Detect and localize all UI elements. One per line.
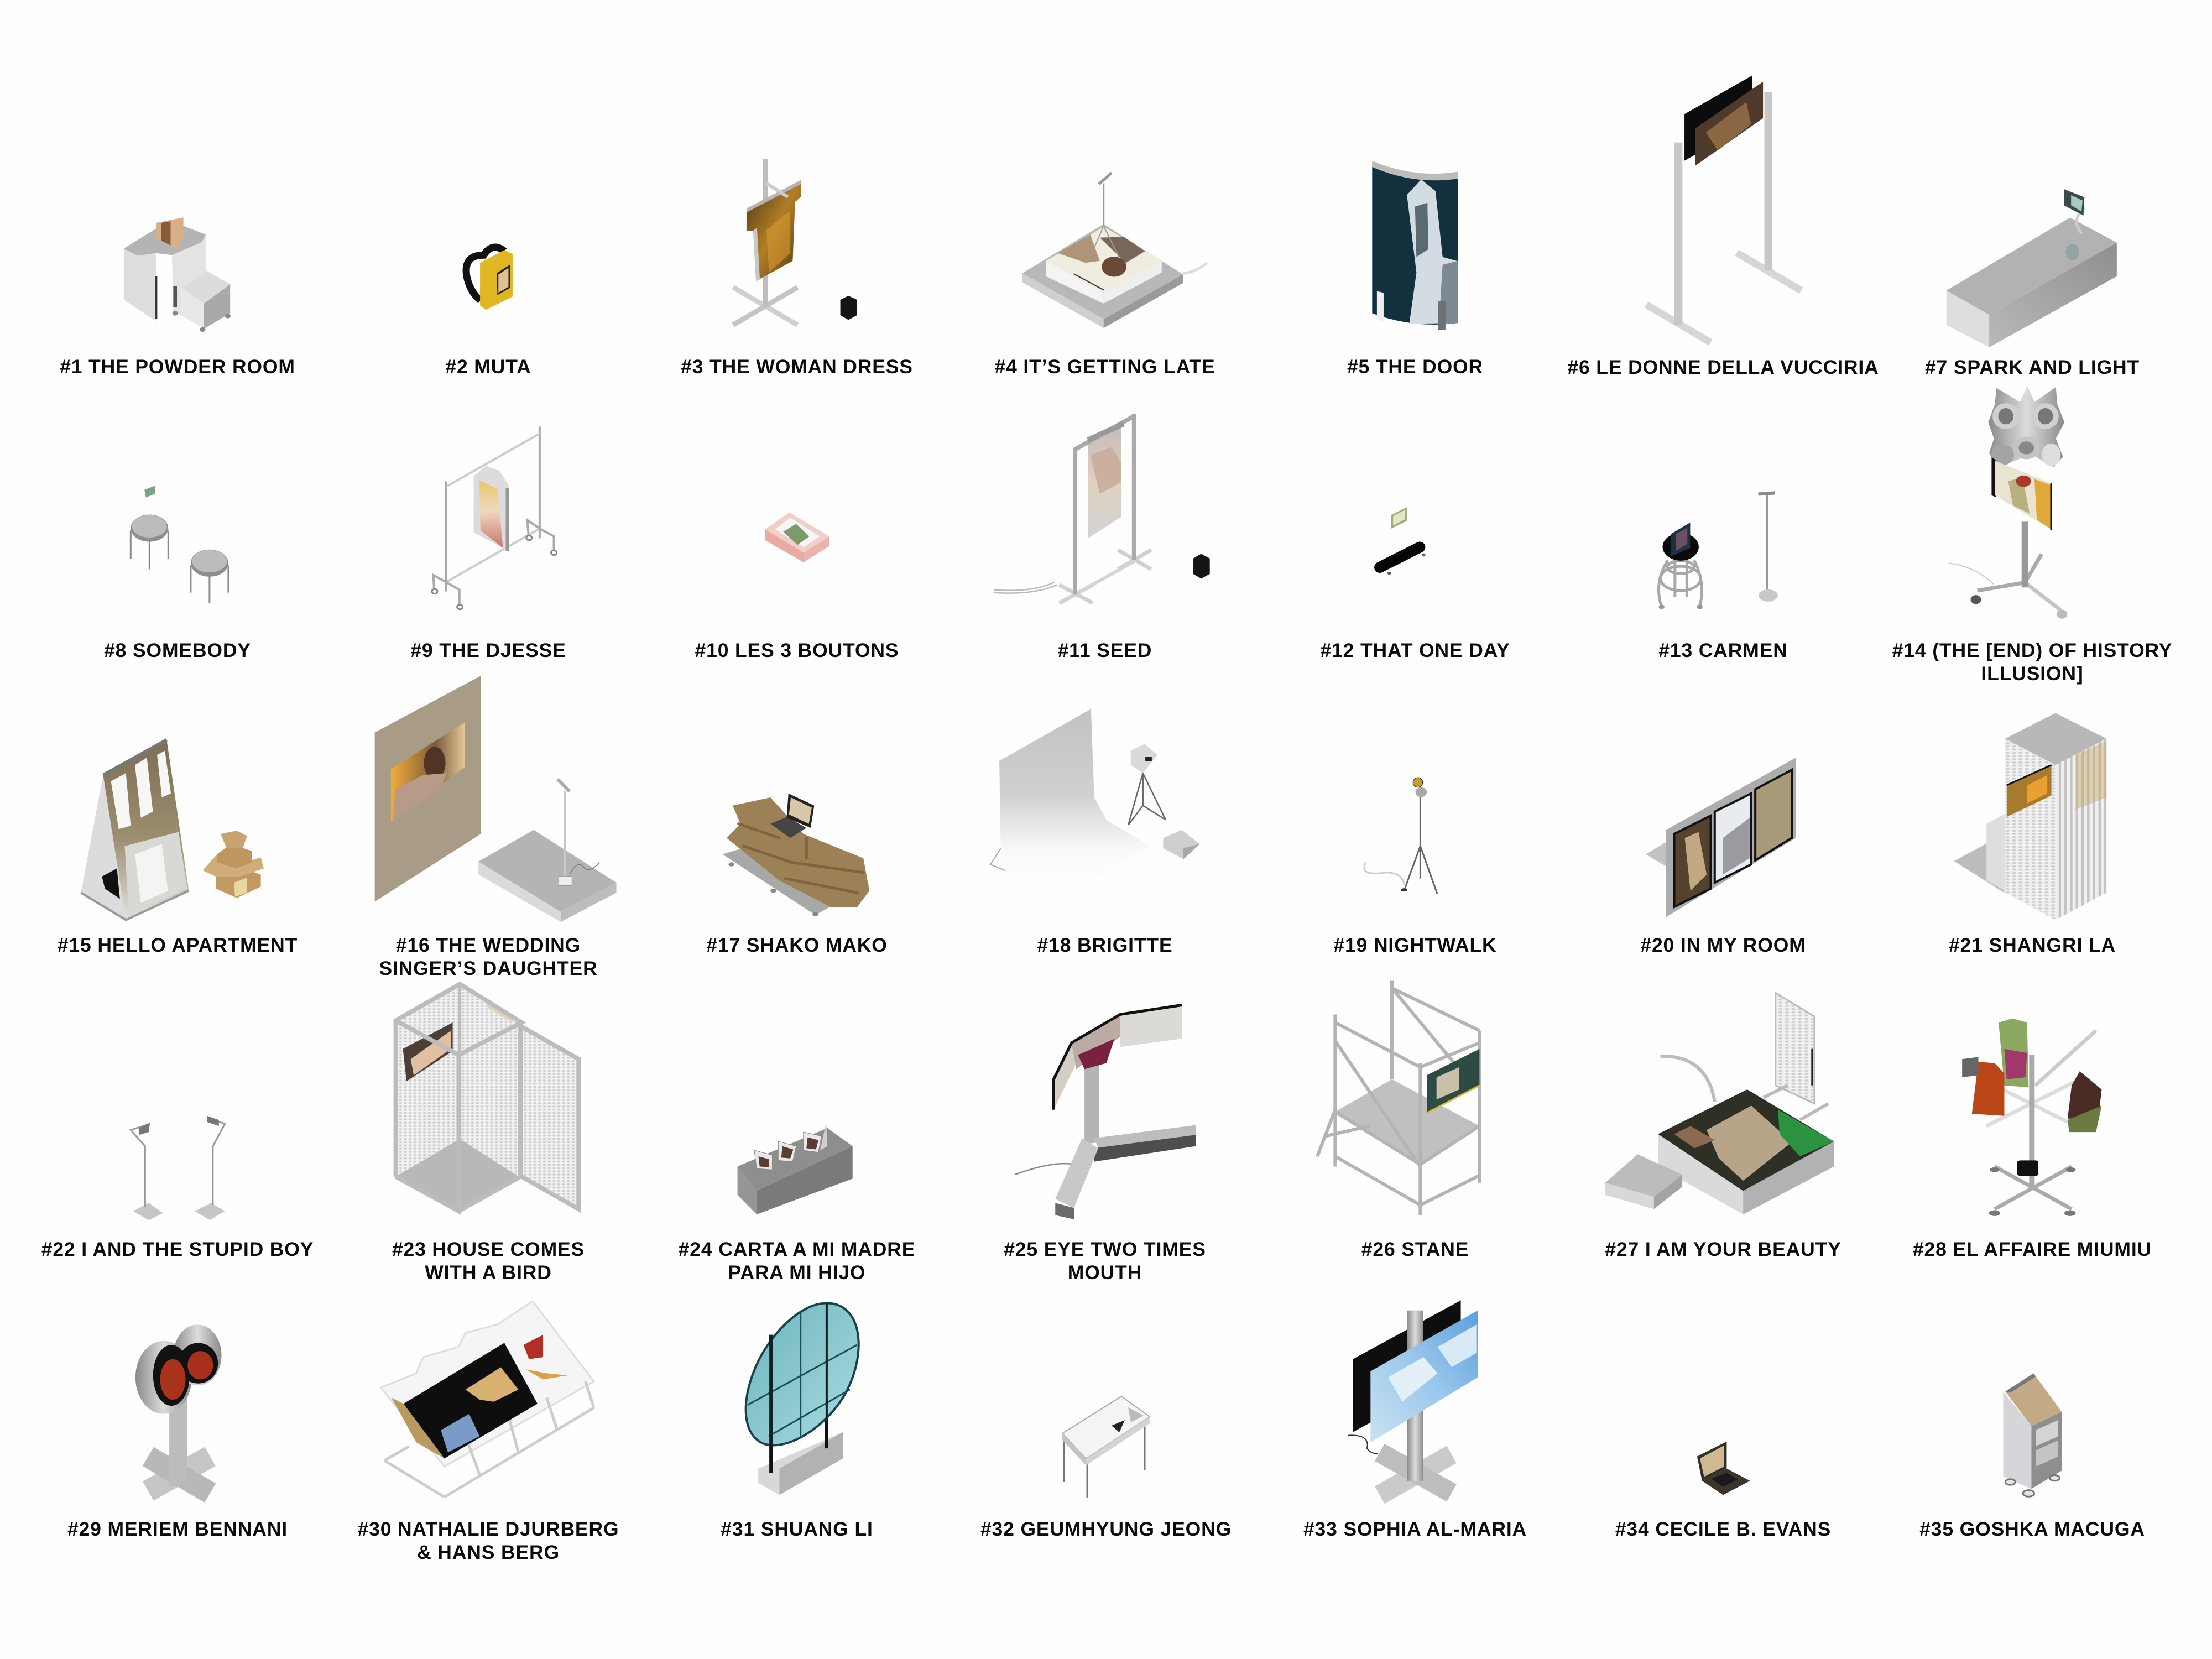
label: #10: #10 LES 3 BOUTONS — [695, 639, 899, 661]
icon: horn cluster on wheeled stand with screen — [1949, 386, 2067, 619]
label: #29: #29 MERIEM BENNANI — [67, 1518, 288, 1540]
label: #16: #16 THE WEDDING — [396, 934, 581, 956]
icon: mesh cage with screen — [396, 984, 578, 1211]
label: #20: #20 IN MY ROOM — [1640, 934, 1806, 956]
panel: #6 Le Donne Della Vucciria — [1567, 76, 1879, 378]
label: #25: #25 EYE TWO TIMES — [1004, 1238, 1206, 1260]
icon: neon twin-lobe sign on cross base — [135, 1324, 222, 1493]
label: #23: #23 HOUSE COMES — [392, 1238, 585, 1260]
label: #35: #35 GOSHKA MACUGA — [1919, 1518, 2145, 1540]
panel: #26 Stane — [1317, 981, 1479, 1260]
label: #22: #22 I AND THE STUPID BOY — [41, 1238, 314, 1260]
icon: powder room booth and cabinet — [124, 217, 231, 332]
label: #17: #17 SHAKO MAKO — [706, 934, 888, 956]
icon: photo backdrop with light and box — [989, 709, 1199, 899]
panel: #27 I Am Your Beauty — [1605, 993, 1841, 1260]
panel: #24 Carta a Mi Madre Para Mi Hijo — [679, 1122, 915, 1284]
icon: textured wall with screen and microphone plinth — [375, 676, 617, 922]
icon: pink box with screen — [765, 512, 830, 562]
icon: two stools and small screen — [131, 486, 228, 603]
label: #13: #13 CARMEN — [1658, 639, 1788, 661]
panel: #21 Shangri La — [1949, 713, 2116, 956]
icon: banner frame with speaker — [994, 414, 1210, 603]
icon: grey block with three small screens — [738, 1122, 853, 1214]
panel: #17 Shako Mako — [706, 794, 888, 956]
icon: triptych window screens — [1646, 758, 1796, 917]
panel: #5 The Door — [1347, 161, 1483, 378]
panel: #13 Carmen — [1658, 493, 1788, 661]
label: #28: #28 EL AFFAIRE MIUMIU — [1913, 1238, 2152, 1260]
panel: #18 Brigitte — [989, 709, 1199, 956]
panel: #35 Goshka Macuga — [1919, 1373, 2145, 1540]
label: #14: ILLUSION] — [1981, 662, 2084, 685]
panel: #29 Meriem Bennani — [67, 1324, 288, 1540]
label: #12: #12 THAT ONE DAY — [1320, 639, 1510, 661]
icon: LED box, mesh panel and small box — [1605, 993, 1834, 1214]
icon: laptop — [1697, 1442, 1750, 1495]
label: #7: #7 SPARK AND LIGHT — [1925, 356, 2140, 378]
panel: #11 Seed — [994, 414, 1210, 661]
panel: #25 Eye Two Times Mouth — [1004, 1005, 1206, 1284]
panel: #7 Spark and Light — [1925, 189, 2140, 378]
panel: #28 El Affaire Miumiu — [1913, 1019, 2152, 1260]
icon: bar stool with screen and microphone stand — [1658, 493, 1778, 609]
panel: #32 Geumhyung Jeong — [980, 1396, 1232, 1540]
panel: #31 Shuang Li — [721, 1302, 873, 1540]
label: #31: #31 SHUANG LI — [721, 1518, 873, 1540]
label: #11: #11 SEED — [1058, 639, 1152, 661]
panel: #23 House Comes With a Bird — [392, 984, 585, 1284]
label: #23: WITH A BIRD — [425, 1261, 552, 1284]
panel: #34 Cecile B. Evans — [1615, 1442, 1831, 1540]
icon: wheeled cart with display top — [2003, 1373, 2062, 1496]
panel: #16 The Wedding Singer's Daughter — [375, 676, 617, 979]
panel: #15 Hello Apartment — [58, 740, 298, 956]
icon: circular teal screen on plinth — [746, 1302, 859, 1495]
icon: two small screen stands — [131, 1116, 225, 1220]
panel: #12 That One Day — [1320, 507, 1510, 661]
label: #15: #15 HELLO APARTMENT — [58, 934, 298, 956]
panel: #3 The Woman Dress — [681, 159, 913, 378]
label: #25: MOUTH — [1068, 1261, 1142, 1284]
panel: #30 Nathalie Djurberg & Hans Berg — [358, 1301, 619, 1563]
label: #21: #21 SHANGRI LA — [1949, 934, 2116, 956]
icon: white table with object — [1062, 1396, 1150, 1498]
icon: curved screen door — [1372, 161, 1458, 330]
icon: T-shaped screen on stand with speaker — [733, 159, 857, 325]
panel: #9 The Djesse — [410, 426, 566, 661]
label: #16: SINGER’S DAUGHTER — [379, 957, 598, 979]
label: #24: #24 CARTA A MI MADRE — [679, 1238, 915, 1260]
icon: three-panel screen on Y base — [1015, 1005, 1196, 1219]
icon: metal scaffold with screen — [1317, 981, 1479, 1215]
panel: #14 (The [End) of History Illusion] — [1892, 386, 2172, 685]
label: #2: #2 MUTA — [445, 356, 531, 378]
label: #5: #5 THE DOOR — [1347, 356, 1483, 378]
icon: plinth with projected image and microphone — [1022, 173, 1207, 328]
label: #19: #19 NIGHTWALK — [1333, 934, 1497, 956]
icon: sandbags on trolley with laptop — [722, 794, 869, 916]
panel: #33 Sophia Al-Maria — [1303, 1300, 1527, 1540]
label: #24: PARA MI HIJO — [728, 1261, 865, 1284]
label: #8: #8 SOMEBODY — [104, 639, 251, 661]
label: #6: #6 LE DONNE DELLA VUCCIRIA — [1567, 356, 1879, 378]
icon: clothes rail with hanging screen — [432, 426, 557, 609]
icon: yellow backpack with screen — [466, 247, 513, 310]
panel: #8 Somebody — [104, 486, 251, 661]
panel: #20 In My Room — [1640, 758, 1806, 956]
panel: #4 It's Getting Late — [994, 173, 1215, 378]
panel: #22 I and the Stupid Boy — [41, 1116, 314, 1260]
icon: double-sided sky screen on pole — [1348, 1300, 1478, 1495]
label: #32: #32 GEUMHYUNG JEONG — [980, 1518, 1232, 1540]
panel: #2 Muta — [445, 247, 531, 378]
icon: two-screen gantry — [1646, 76, 1801, 342]
panel: #1 The Powder Room — [60, 217, 295, 378]
label: #18: #18 BRIGITTE — [1037, 934, 1172, 956]
icon: perforated tower with screen — [1954, 713, 2106, 920]
label: #30: #30 NATHALIE DJURBERG — [358, 1518, 619, 1540]
icon: garment rack with clothes on casters — [1962, 1019, 2101, 1216]
label: #34: #34 CECILE B. EVANS — [1615, 1518, 1831, 1540]
panel: #19 Nightwalk — [1333, 778, 1497, 956]
label: #4: #4 IT’S GETTING LATE — [994, 356, 1215, 378]
label: #30: & HANS BERG — [417, 1541, 560, 1563]
label: #33: #33 SOPHIA AL-MARIA — [1303, 1518, 1527, 1540]
label: #26: #26 STANE — [1361, 1238, 1469, 1260]
icon: skateboard with small screen — [1380, 507, 1426, 575]
icon: concrete bench with small screen — [1947, 189, 2117, 347]
label: #9: #9 THE DJESSE — [410, 639, 566, 661]
panel: #10 Les 3 Boutons — [695, 512, 899, 661]
label: #14: #14 (THE [END) OF HISTORY — [1892, 639, 2172, 661]
label: #1: #1 THE POWDER ROOM — [60, 356, 295, 378]
label: #3: #3 THE WOMAN DRESS — [681, 356, 913, 378]
label: #27: #27 I AM YOUR BEAUTY — [1605, 1238, 1841, 1260]
icon: deck chairs with printed images — [381, 1301, 594, 1497]
icon: tripod stand with tiny screen — [1364, 778, 1437, 894]
icon: A-frame mirror screen and cardboard boxes — [81, 740, 264, 920]
